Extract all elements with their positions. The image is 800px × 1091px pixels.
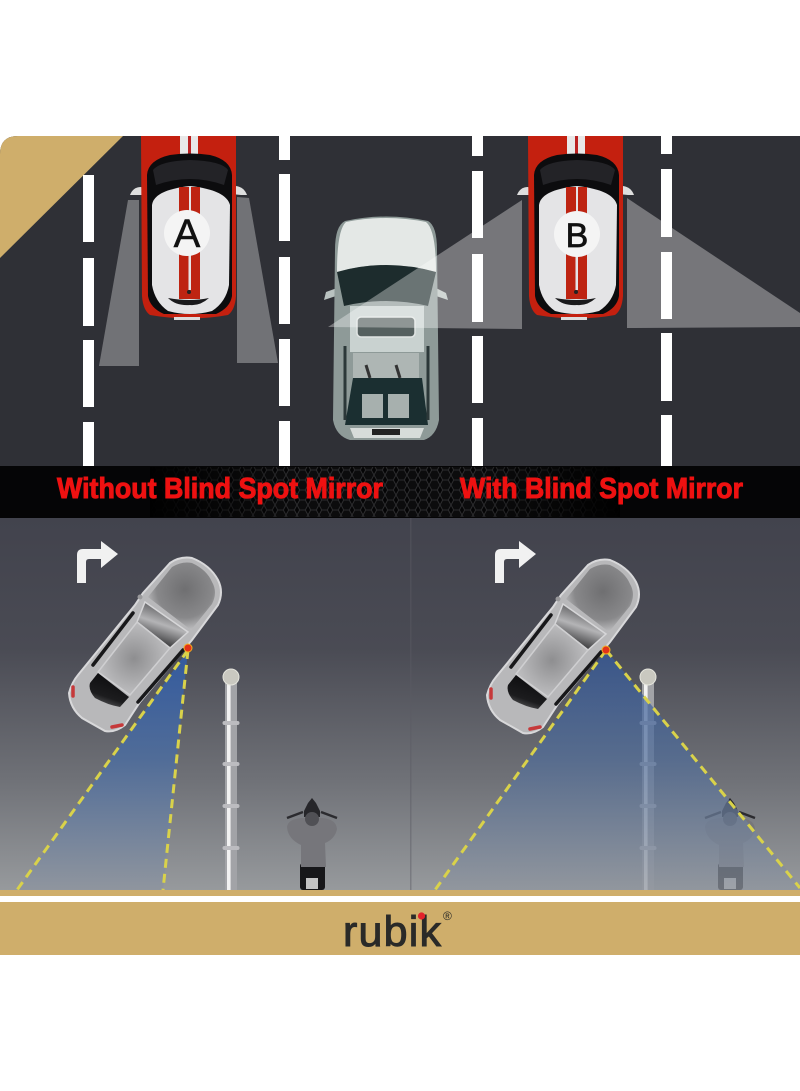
red dot on the i [418,912,425,920]
caption: without blind spot mirror: Without Blind Spot Mirror [57,473,383,505]
gold corner wedge [0,136,123,258]
car A: red car without blind spot mirror [130,136,247,320]
car B: red car with blind spot mirror [517,136,634,320]
dashed edges right [435,650,800,890]
turn arrow left [77,541,118,583]
silver car right [487,560,639,733]
road surface [0,136,800,467]
blue view cone left [17,650,188,890]
blind spot beams car A [99,197,278,366]
label circle A [164,210,210,256]
night road background [0,518,800,891]
motorcyclist left [287,798,337,890]
caption: with blind spot mirror: With Blind Spot Mirror [460,473,743,505]
registered mark: ® [443,909,452,923]
turn arrow right [495,541,536,583]
footer brand band [0,890,800,956]
mirror marker left [184,644,192,652]
letter A: A [174,212,201,256]
label circle B [554,211,600,257]
panel: top road diagram [0,136,800,467]
letter B: B [566,217,588,255]
overtaking grey car [324,216,448,440]
rubik logo: rubik [343,908,442,956]
blue view cone right [435,650,800,890]
panel: lower turning diagram [0,518,800,891]
mirror marker right [602,646,610,654]
wide beams car B [328,198,800,329]
pole right [640,669,656,891]
dashed edges left [17,650,188,890]
caption band [0,466,800,518]
silver car left [69,558,221,731]
pole left [223,669,239,891]
lane lines [83,136,672,466]
hexagon mesh [150,467,620,517]
left scene: narrow mirror view [17,541,337,891]
motorcyclist right [705,798,755,890]
right scene: wide mirror view [435,541,800,891]
